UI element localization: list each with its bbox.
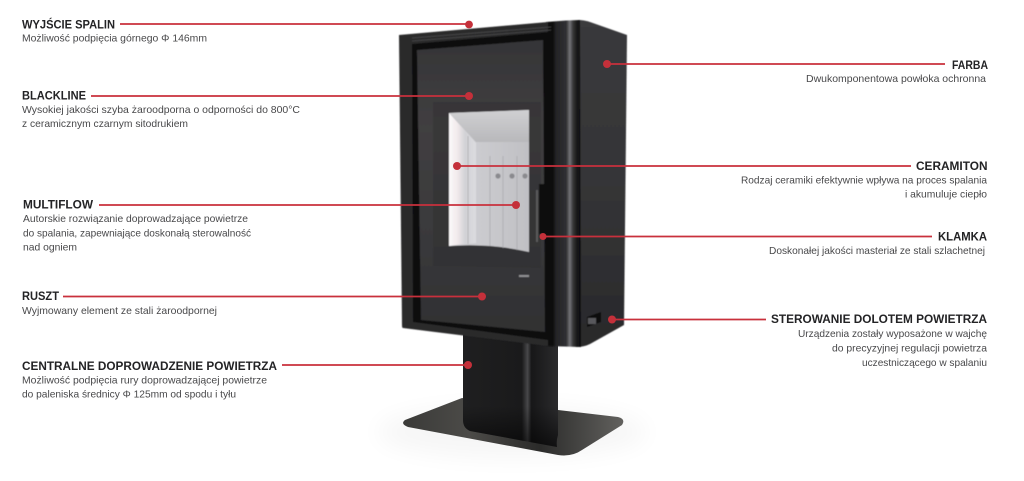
pedestal column	[463, 330, 558, 447]
leader line	[608, 316, 766, 324]
description: uczestniczącego w spalaniu	[862, 358, 987, 369]
description	[22, 105, 300, 130]
stove body	[399, 20, 627, 347]
heading: CENTRALNE DOPROWADZENIE POWIETRZA	[22, 360, 278, 373]
description: Autorskie rozwiązanie doprowadzające powietrze	[23, 214, 248, 225]
heading: KLAMKA	[938, 230, 988, 244]
heading: STEROWANIE DOLOTEM POWIETRZA	[771, 313, 988, 326]
leader line	[453, 162, 911, 170]
heading: FARBA	[952, 59, 989, 72]
description	[798, 329, 987, 369]
glass door	[417, 40, 545, 332]
leader line	[99, 201, 520, 209]
heading: CERAMITON	[916, 160, 988, 173]
description: do precyzyjnej regulacji powietrza	[832, 344, 987, 354]
side panel	[576, 20, 627, 347]
callout: Multiflow	[23, 198, 520, 254]
door badge	[519, 275, 529, 277]
leader line	[540, 233, 932, 240]
heading: RUSZT	[22, 290, 59, 303]
callout: Sterowanie dolotem powietrza	[608, 313, 988, 369]
description: i akumuluje ciepło	[905, 190, 987, 200]
description: Rodzaj ceramiki efektywnie wpływa na proces spalania	[741, 176, 987, 186]
description: Doskonałej jakości masteriał ze stali szlachetnej	[769, 246, 985, 257]
description	[741, 176, 987, 200]
description: Dwukomponentowa powłoka ochronna	[806, 74, 986, 85]
firebox window	[449, 110, 529, 252]
inner glass shade	[433, 102, 541, 268]
leader line	[603, 60, 945, 68]
description: Możliwość podpięcia górnego Φ 146mm	[22, 34, 207, 44]
door handle	[536, 184, 545, 242]
stove illustration	[377, 20, 647, 458]
callout: Farba	[603, 59, 989, 85]
ceramic fasteners	[495, 173, 528, 179]
description	[22, 376, 267, 400]
callout: Klamka	[540, 230, 988, 257]
callout: Blackline	[22, 90, 473, 130]
air control lever	[587, 312, 601, 327]
top vent lines	[412, 27, 551, 41]
ceramic ribs	[468, 136, 517, 250]
description	[23, 214, 251, 254]
description: z ceramicznym czarnym sitodrukiem	[22, 119, 188, 130]
firebox background	[449, 110, 529, 252]
description: nad ogniem	[23, 242, 77, 254]
rounded corner with highlight	[546, 20, 581, 347]
heading: WYJŚCIE SPALIN	[22, 18, 115, 32]
description: Urządzenia zostały wyposażone w wajchę	[798, 329, 987, 340]
leader line	[120, 21, 473, 28]
callout: Ruszt	[22, 290, 486, 317]
description: do paleniska średnicy Φ 125mm od spodu i tyłu	[22, 390, 236, 400]
heading: BLACKLINE	[22, 90, 86, 102]
front frame	[399, 22, 548, 346]
leader line	[63, 292, 486, 300]
ceramic ceiling	[449, 110, 529, 142]
callout: Centralne doprowadzenie powietrza	[22, 360, 472, 400]
base plate	[403, 398, 623, 455]
description: Wyjmowany element ze stali żaroodpornej	[22, 306, 217, 317]
description: Możliwość podpięcia rury doprowadzającej powietrze	[22, 376, 267, 386]
floor shadow	[377, 406, 647, 458]
leader line	[91, 92, 473, 100]
heading: MULTIFLOW	[23, 198, 93, 212]
ceramic left wall	[449, 113, 476, 246]
callout: Wyjście spalin	[22, 18, 473, 44]
description: do spalania, zapewniające doskonałą sterowalność	[23, 228, 251, 240]
description: Wysokiej jakości szyba żaroodporna o odporności do 800°C	[22, 105, 300, 116]
leader line	[282, 361, 472, 369]
frame inner dark band	[412, 32, 548, 340]
callout: Ceramiton	[453, 160, 988, 200]
